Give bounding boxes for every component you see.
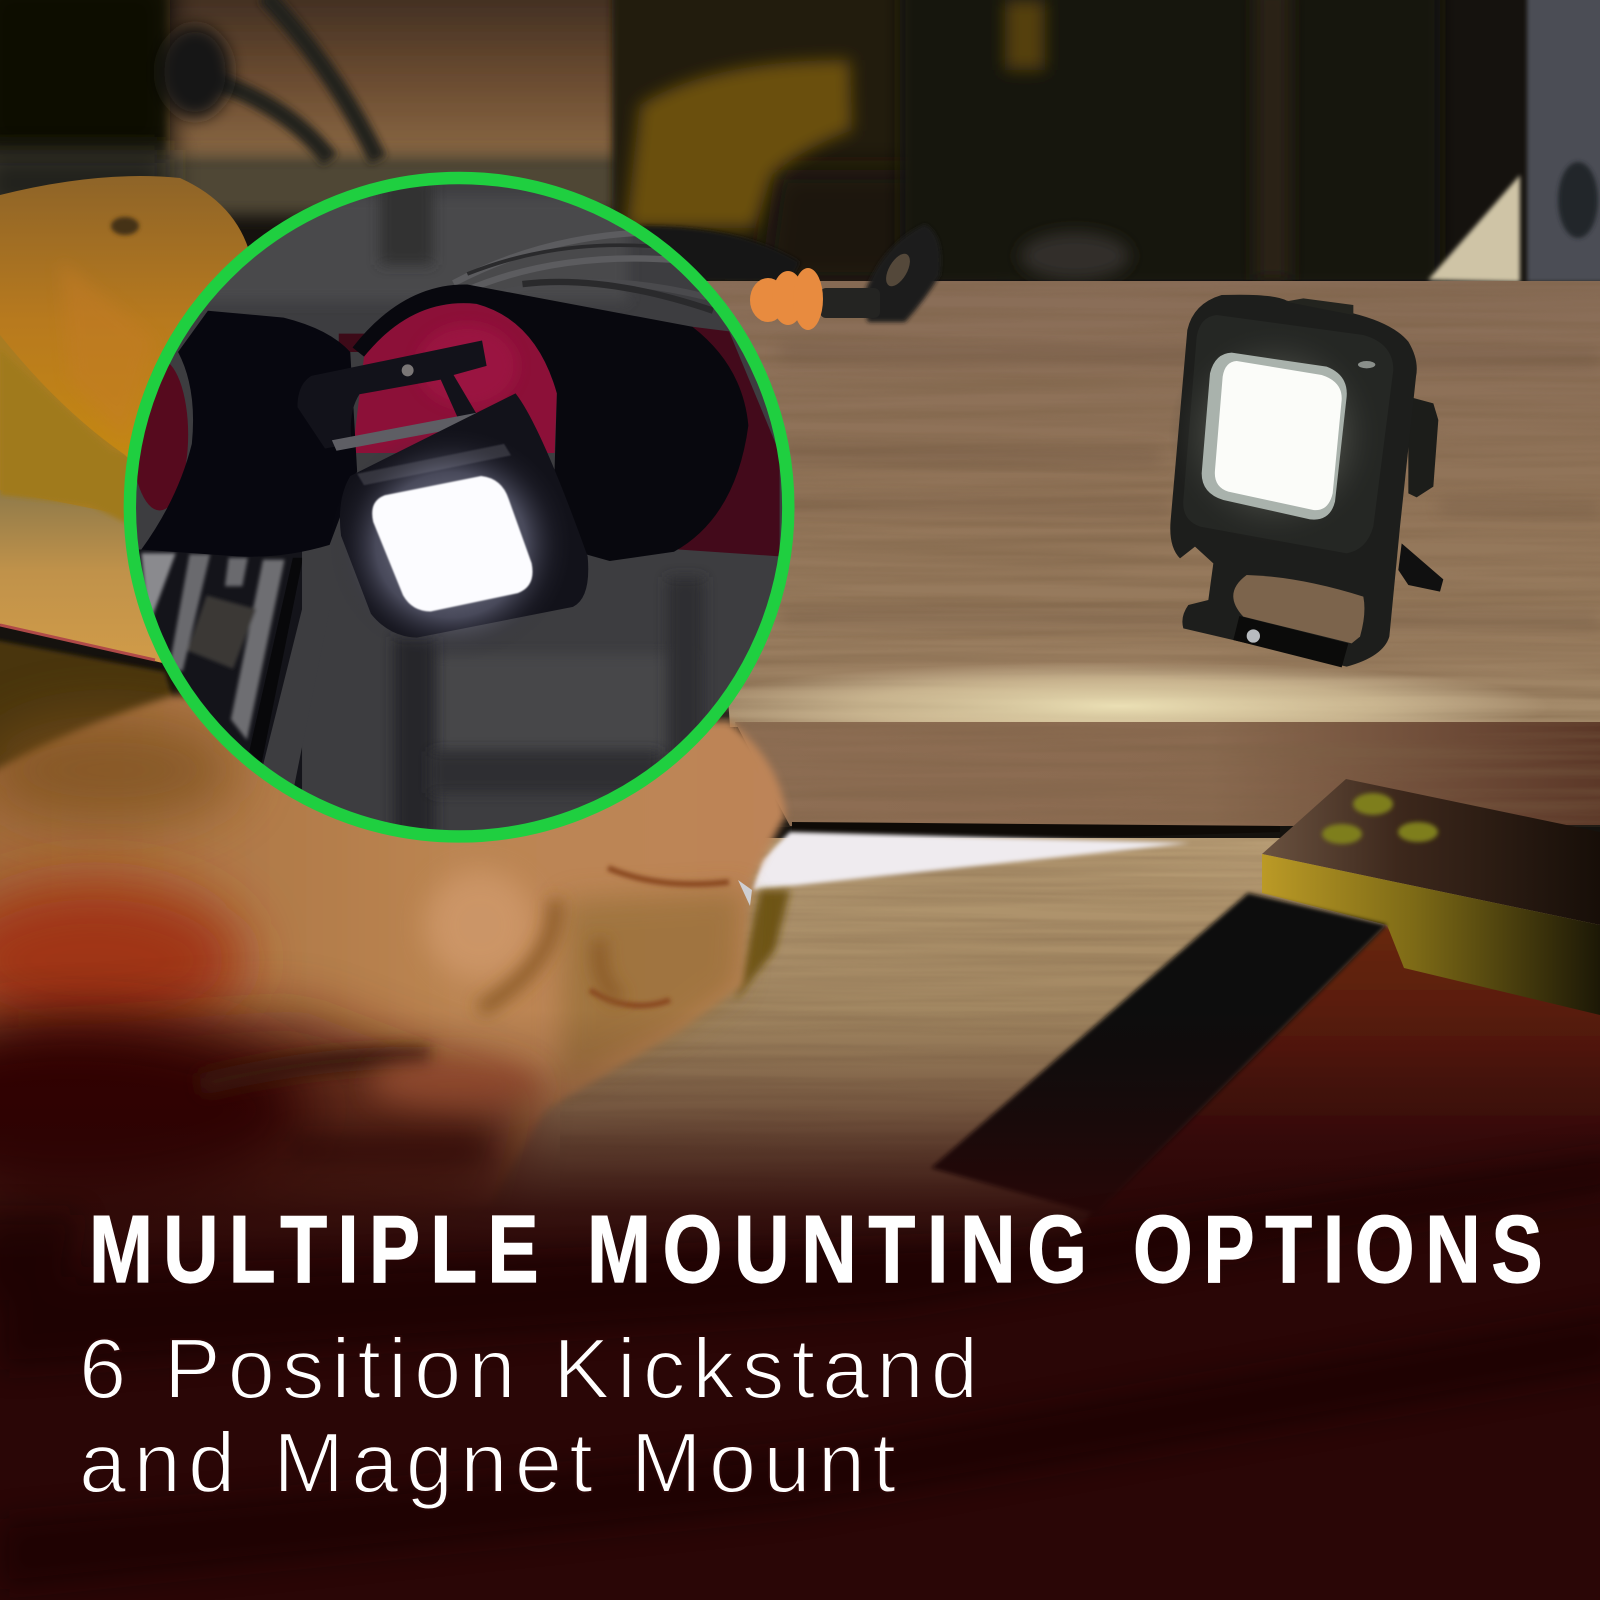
bottom dark red fade xyxy=(0,1010,1600,1600)
blurred hand holding pencil xyxy=(0,695,790,1260)
lower work surface xyxy=(0,838,1600,1600)
icon: lens bezel xyxy=(1202,353,1347,520)
work glove xyxy=(0,176,252,790)
icon: side switch xyxy=(1408,397,1438,497)
background: blurred workshop shelf xyxy=(0,0,1600,290)
inset background xyxy=(118,168,798,848)
subtitle xyxy=(79,1322,978,1511)
left sleeve xyxy=(141,311,357,557)
icon: front panel xyxy=(1183,315,1393,553)
lens glow xyxy=(346,440,556,638)
glove second finger xyxy=(0,350,200,530)
table top with wood grain xyxy=(690,281,1600,750)
earplug with cord on the table xyxy=(750,224,941,330)
icon: lens glow xyxy=(1168,325,1382,545)
icon: kickstand xyxy=(1398,543,1443,592)
steel cable xyxy=(454,233,713,311)
title: MULTIPLE xyxy=(89,1196,539,1303)
title xyxy=(89,1196,1543,1303)
dark red wood streaks xyxy=(0,1150,1600,1590)
speed square ruler xyxy=(931,779,1600,1214)
red bar xyxy=(678,326,780,556)
pencil tip xyxy=(738,880,752,906)
flashlight standing on table with kickstand xyxy=(1168,295,1443,667)
icon: orange plug xyxy=(750,268,823,330)
right sleeve xyxy=(353,285,748,561)
finger shading xyxy=(560,890,745,1085)
rack and legs xyxy=(138,550,302,790)
red rubber ends xyxy=(353,303,557,453)
icon: loop clip xyxy=(862,224,941,322)
table front edge xyxy=(735,722,1600,838)
title: MOUNTING xyxy=(587,1196,1087,1303)
green ring xyxy=(130,178,788,836)
white paper sheet xyxy=(752,832,1190,890)
upper-left shadow of hand xyxy=(0,715,240,825)
title: OPTIONS xyxy=(1133,1196,1543,1303)
icon: carabiner gap xyxy=(1233,575,1364,643)
mounted flashlight carabiner xyxy=(298,340,487,451)
icon: lit lens xyxy=(1215,361,1342,510)
icon: body xyxy=(1170,295,1417,667)
knuckle highlight xyxy=(425,870,535,980)
icon: cord xyxy=(820,288,880,318)
inset circle: flashlight mounted on a bar xyxy=(118,168,798,848)
broad grain bands xyxy=(780,345,1600,628)
mounted flashlight body xyxy=(340,393,588,638)
glove base xyxy=(0,330,200,660)
subtitle line 2: and Magnet Mount xyxy=(79,1416,896,1511)
subtitle line 1: 6 Position Kickstand xyxy=(79,1322,978,1417)
glove top finger xyxy=(0,176,252,500)
finger creases xyxy=(590,868,729,1006)
glove cuff xyxy=(0,490,200,672)
lit lens xyxy=(372,476,533,611)
red glow on the hand xyxy=(0,880,245,1040)
black strap behind inset xyxy=(640,226,800,282)
dark red surface right of the ruler xyxy=(1000,925,1600,1340)
